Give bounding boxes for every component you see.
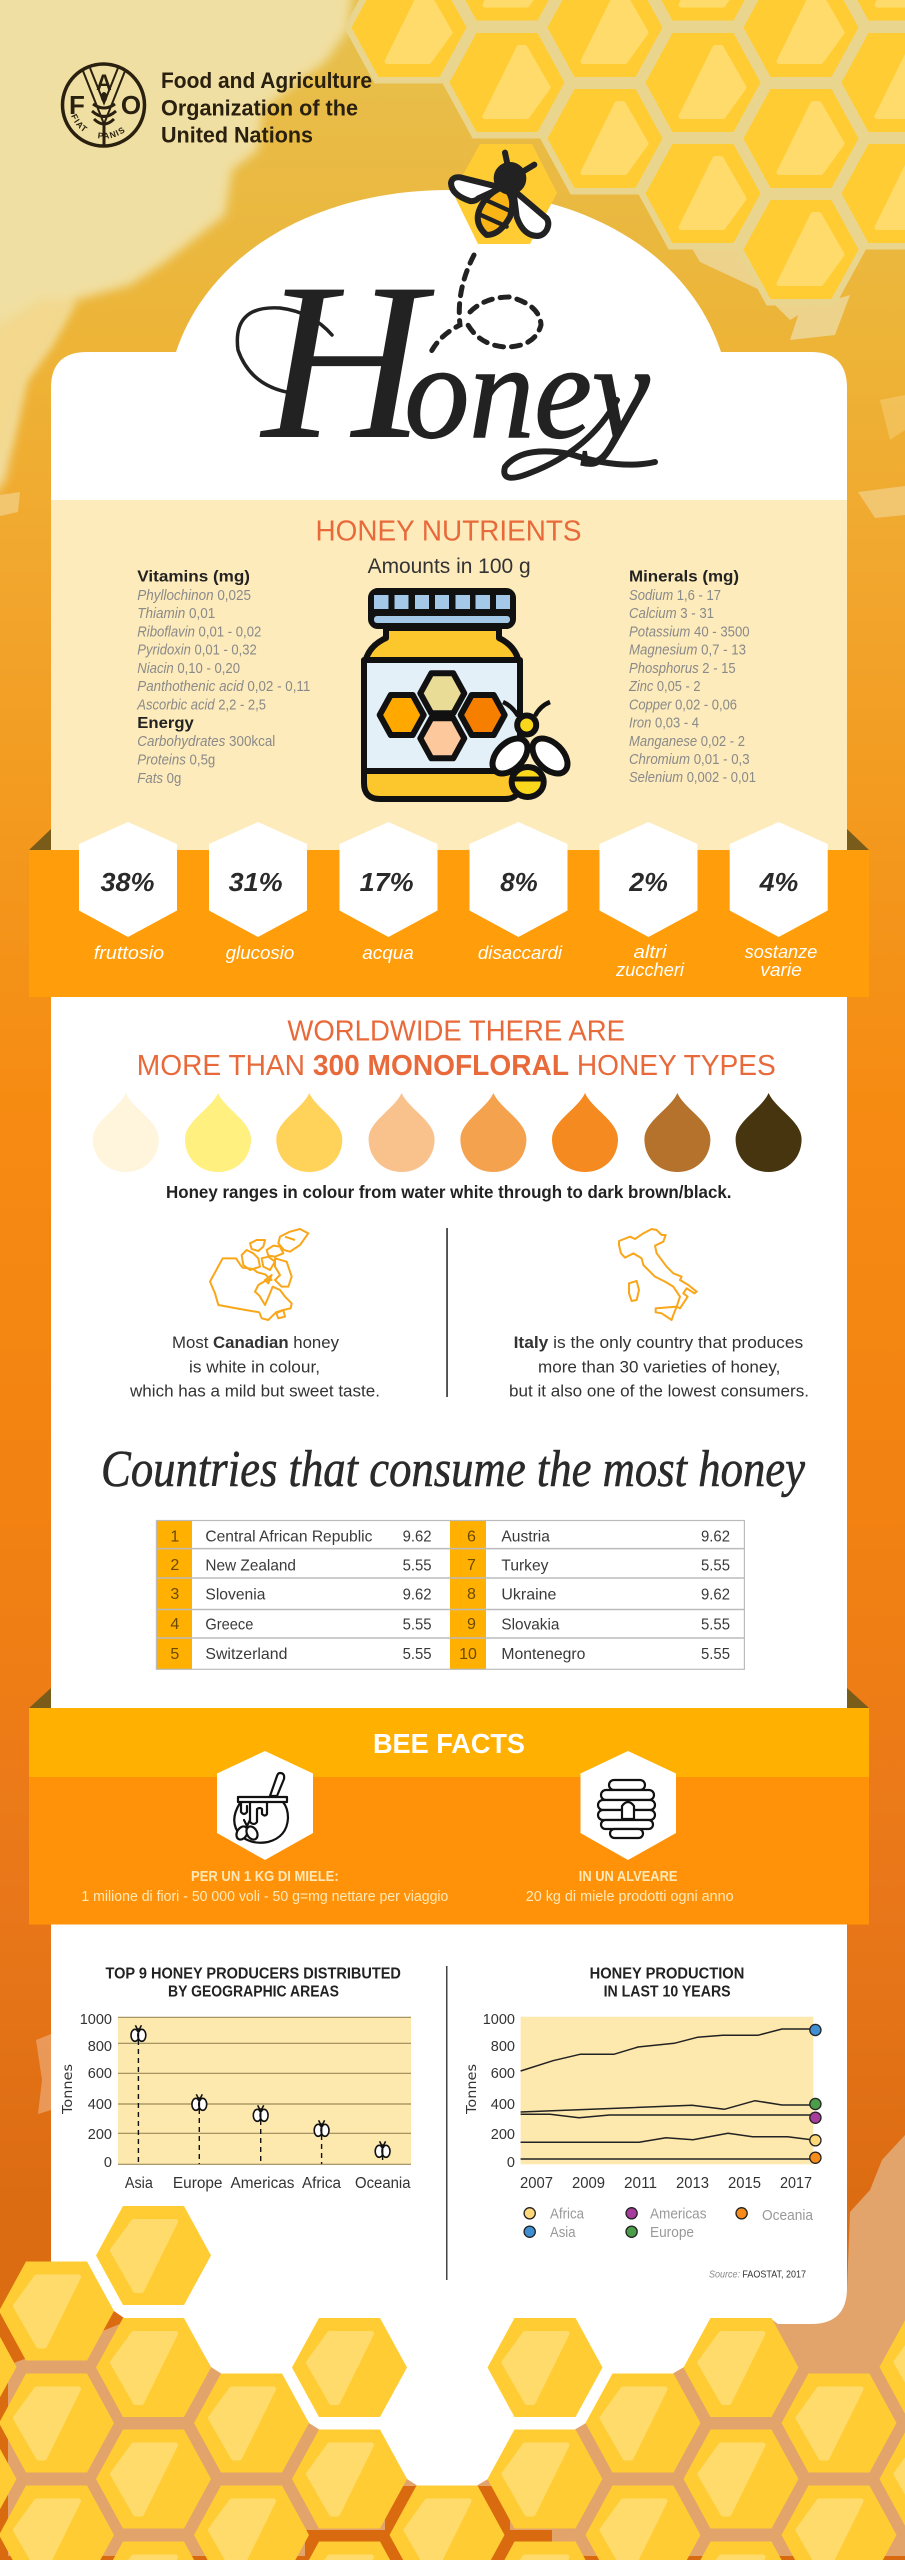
FAO logo and name: United Nations [161, 122, 313, 148]
chart: honey production in last 10 years: Tonnes [465, 2064, 480, 2115]
table: honey consumption ranking: 8 [467, 1586, 476, 1603]
hexagon: fruttosio [79, 822, 177, 963]
chart: top producers by area [61, 1966, 411, 2192]
hexagon: sostanze varie: varie [760, 960, 802, 980]
icon: bee on honeycomb cell [451, 144, 557, 244]
text block: minerals: Chromium 0,01 - 0,3 [629, 752, 750, 768]
text block: vitamins and energy: Thiamin 0,01 [137, 606, 215, 622]
chart title [106, 1966, 401, 2000]
hexagon: disaccardi [470, 822, 568, 963]
text block: minerals: Zinc 0,05 - 2 [628, 679, 700, 695]
table: honey consumption ranking: 3 [170, 1586, 179, 1603]
map: Italy [619, 1229, 697, 1320]
chart: top producers by area: Africa [302, 2175, 341, 2192]
heading: monofloral honey types: WORLDWIDE THERE ARE [287, 1016, 625, 1048]
table: honey consumption ranking: Slovenia [205, 1586, 265, 1604]
table: honey consumption ranking: 9.62 [701, 1586, 730, 1604]
table: honey consumption ranking: 2 [170, 1557, 179, 1574]
chart title [590, 1966, 744, 2000]
chart: top producers by area: 800 [88, 2039, 112, 2055]
text block: vitamins and energy: Vitamins (mg) [137, 568, 250, 586]
table: honey consumption ranking: Ukraine [501, 1586, 556, 1604]
chart: honey production in last 10 years: 2007 [520, 2175, 553, 2192]
chart: top producers by area: 400 [88, 2097, 112, 2113]
panel: honey nutrients [51, 500, 847, 850]
text block: vitamins and energy: Ascorbic acid 2,2 - 2,5 [136, 698, 266, 714]
text block: Canadian honey: is white in colour, [189, 1358, 320, 1376]
chart: top producers by area: Europe [173, 2175, 222, 2192]
chart: honey production in last 10 years: 600 [491, 2066, 515, 2082]
table: honey consumption ranking: 7 [467, 1557, 476, 1574]
text block: Italian honey [509, 1333, 809, 1400]
table: honey consumption ranking: Austria [501, 1528, 550, 1546]
table: honey consumption ranking: Turkey [501, 1558, 548, 1574]
FAO logo and name: FIAT PANIS [71, 114, 124, 138]
legend: Asia [550, 2225, 576, 2241]
band: bee facts [29, 1688, 869, 1924]
text block: minerals: Selenium 0,002 - 0,01 [629, 770, 756, 786]
fact: one kg of honey: 1 milione di fiori - 50 000 voli - 50 g=mg nettare per viaggio [81, 1889, 448, 1905]
table: honey consumption ranking: Greece [205, 1616, 253, 1634]
hexagon: disaccardi: disaccardi [478, 943, 563, 963]
legend [524, 2206, 814, 2241]
table: honey consumption ranking: 5.55 [403, 1616, 432, 1634]
legend: Africa [550, 2206, 585, 2222]
table: honey consumption ranking [156, 1520, 744, 1669]
hexagon: glucosio [209, 822, 307, 963]
hexagon: altri zuccheri: 2% [628, 867, 668, 897]
honey colour drops [93, 1093, 802, 1172]
hexagon: disaccardi: 8% [500, 867, 538, 897]
hexagon: fruttosio: 38% [100, 867, 154, 897]
text block: minerals: Iron 0,03 - 4 [629, 716, 699, 732]
honeycomb: lattice behind the bottom cells [0, 2320, 905, 2560]
legend: Europe [650, 2225, 694, 2241]
fact: one kg of honey [81, 1868, 448, 1905]
text block: minerals: Magnesium 0,7 - 13 [629, 642, 746, 658]
text block: Canadian honey: which has a mild but sweet taste. [129, 1382, 380, 1400]
icon: beehive [580, 1751, 676, 1860]
hexagon: altri zuccheri [600, 822, 698, 980]
chart: honey production in last 10 years: 800 [491, 2039, 515, 2055]
chart: honey production in last 10 years: 200 [491, 2127, 515, 2143]
subheading: amounts: Amounts in 100 g [368, 555, 531, 578]
icon: honey pot [217, 1751, 313, 1860]
text block: minerals: Copper 0,02 - 0,06 [629, 698, 737, 714]
chart: top producers by area: Americas [230, 2175, 295, 2192]
legend: Oceania [762, 2208, 814, 2224]
honeycomb: bottom cells [0, 2206, 905, 2560]
chart: honey production in last 10 years: 2013 [676, 2175, 709, 2192]
caption: honey colour range: Honey ranges in colour from water white through to dark brown/black. [166, 1182, 732, 1202]
table: honey consumption ranking: Central African Republic [205, 1528, 372, 1546]
chart: top producers by area: 1000 [80, 2012, 112, 2028]
table: honey consumption ranking: New Zealand [205, 1558, 296, 1574]
panel: main white card [51, 190, 847, 2486]
hexagon: sostanze varie [730, 822, 828, 980]
text block: Italian honey: more than 30 varieties of honey, [538, 1358, 780, 1376]
heading: countries that consume the most honey: Countries that consume the most honey [101, 1441, 806, 1498]
heading: honey nutrients: HONEY NUTRIENTS [316, 516, 582, 548]
source note: Source: FAOSTAT, 2017 [709, 2268, 806, 2280]
band: sugar composition [29, 822, 869, 997]
FAO logo and name: A [96, 70, 112, 95]
chart title: TOP 9 HONEY PRODUCERS DISTRIBUTED [106, 1966, 401, 1982]
chart: top producers by area: Tonnes [61, 2064, 76, 2115]
line: Africa [521, 2133, 815, 2142]
table: honey consumption ranking: 5.55 [403, 1646, 432, 1663]
text block: vitamins and energy: Proteins 0,5g [137, 752, 215, 768]
text block: minerals [628, 568, 756, 786]
fact: in a hive: IN UN ALVEARE [579, 1868, 678, 1885]
text block: minerals: Sodium 1,6 - 17 [629, 588, 721, 604]
chart title: IN LAST 10 YEARS [604, 1984, 731, 2000]
chart: honey production in last 10 years: 2017 [780, 2175, 812, 2192]
chart: honey production in last 10 years: 2009 [572, 2175, 605, 2192]
table: honey consumption ranking: 10 [459, 1646, 477, 1663]
chart: top producers by area: 200 [88, 2127, 112, 2143]
icon: honey jar [364, 591, 520, 799]
table: honey consumption ranking: Slovakia [501, 1616, 559, 1634]
text block: vitamins and energy: Pyridoxin 0,01 - 0,32 [137, 642, 257, 658]
table: honey consumption ranking: 5 [170, 1646, 179, 1663]
line: Asia [521, 2029, 815, 2071]
FAO logo and name: Organization of the [161, 96, 358, 120]
chart: honey production in last 10 years: 1000 [483, 2012, 515, 2028]
chart: honey production in last 10 years: 2015 [728, 2175, 761, 2192]
line: Oceania [521, 2158, 815, 2160]
text block: minerals: Calcium 3 - 31 [629, 606, 714, 622]
text block: vitamins and energy: Niacin 0,10 - 0,20 [137, 661, 240, 677]
text block: vitamins and energy: Panthothenic acid 0,02 - 0,11 [137, 679, 310, 695]
map: Canada [210, 1229, 308, 1320]
text block: vitamins and energy: Riboflavin 0,01 - 0,02 [137, 624, 261, 640]
hexagon: sostanze varie: sostanze [745, 942, 817, 962]
text block: vitamins and energy: Phyllochinon 0,025 [137, 588, 251, 604]
chart: top producers by area: 600 [88, 2066, 112, 2082]
hexagon: acqua [340, 822, 438, 963]
hexagon: sostanze varie: 4% [759, 867, 798, 897]
title: Honey: Honey [259, 236, 650, 486]
fact: in a hive [526, 1868, 734, 1905]
table: honey consumption ranking: 9.62 [701, 1528, 730, 1546]
chart: honey production in last 10 years [465, 1966, 821, 2280]
chart: top producers by area: Oceania [355, 2175, 411, 2192]
hexagon: glucosio: 31% [229, 867, 283, 897]
text block: vitamins and energy: Carbohydrates 300kcal [137, 734, 275, 750]
line: Europe [521, 2101, 815, 2112]
heading: monofloral honey types: MORE THAN 300 MONOFLORAL HONEY TYPES [137, 1050, 776, 1082]
legend: Americas [650, 2206, 706, 2222]
hexagon: glucosio: glucosio [226, 943, 294, 963]
table: honey consumption ranking: 5.55 [701, 1646, 730, 1663]
table: honey consumption ranking: 1 [170, 1528, 179, 1546]
text block: vitamins and energy [136, 568, 310, 787]
heading: monofloral honey types [137, 1016, 776, 1082]
chart: top producers by area: Asia [125, 2175, 153, 2192]
heading: bee facts: BEE FACTS [373, 1728, 525, 1759]
hexagon: fruttosio: fruttosio [94, 943, 164, 963]
dashed bee flight path [431, 255, 541, 352]
fact: one kg of honey: PER UN 1 KG DI MIELE: [191, 1868, 339, 1885]
text block: minerals: Minerals (mg) [629, 568, 739, 586]
FAO logo and name: Food and Agriculture [161, 68, 372, 93]
hexagon: altri zuccheri: altri [634, 942, 668, 962]
text block: Italian honey: Italy is the only country that produces [514, 1333, 803, 1352]
table: honey consumption ranking: 4 [170, 1616, 179, 1633]
table: honey consumption ranking: 5.55 [403, 1558, 432, 1574]
text block: Italian honey: but it also one of the lowest consumers. [509, 1382, 809, 1400]
FAO logo and name: O [121, 90, 141, 120]
table: honey consumption ranking: 6 [467, 1528, 476, 1546]
chart title: HONEY PRODUCTION [590, 1966, 744, 1982]
table: honey consumption ranking: Montenegro [501, 1646, 585, 1663]
table: honey consumption ranking: Switzerland [205, 1646, 287, 1663]
icon: bee on jar [486, 702, 574, 797]
chart: honey production in last 10 years: 2011 [624, 2175, 657, 2192]
text block: minerals: Potassium 40 - 3500 [629, 624, 750, 640]
text block: minerals: Manganese 0,02 - 2 [629, 734, 745, 750]
hexagon: acqua: acqua [362, 943, 414, 963]
chart: top producers by area: 0 [104, 2155, 112, 2171]
text block: vitamins and energy: Fats 0g [137, 771, 181, 787]
FAO logo and name [60, 62, 372, 148]
table: honey consumption ranking: 9.62 [403, 1528, 432, 1546]
fact: in a hive: 20 kg di miele prodotti ogni anno [526, 1889, 734, 1905]
hexagon: acqua: 17% [360, 867, 414, 897]
table: honey consumption ranking: 9.62 [403, 1586, 432, 1604]
text block: minerals: Phosphorus 2 - 15 [629, 661, 736, 677]
table: honey consumption ranking: 5.55 [701, 1616, 730, 1634]
text block: Canadian honey: Most Canadian honey [172, 1333, 339, 1352]
text block: Canadian honey [129, 1333, 380, 1400]
honeycomb: top right [352, 0, 905, 299]
chart title: BY GEOGRAPHIC AREAS [168, 1984, 339, 2000]
table: honey consumption ranking: 5.55 [701, 1558, 730, 1574]
chart: honey production in last 10 years: 0 [507, 2155, 515, 2171]
text block: vitamins and energy: Energy [137, 715, 194, 732]
hexagon: altri zuccheri: zuccheri [615, 960, 685, 980]
FAO logo and name: F [69, 90, 85, 120]
chart: honey production in last 10 years: 400 [491, 2097, 515, 2113]
table: honey consumption ranking: 9 [467, 1616, 476, 1633]
line: Americas [521, 2114, 815, 2118]
